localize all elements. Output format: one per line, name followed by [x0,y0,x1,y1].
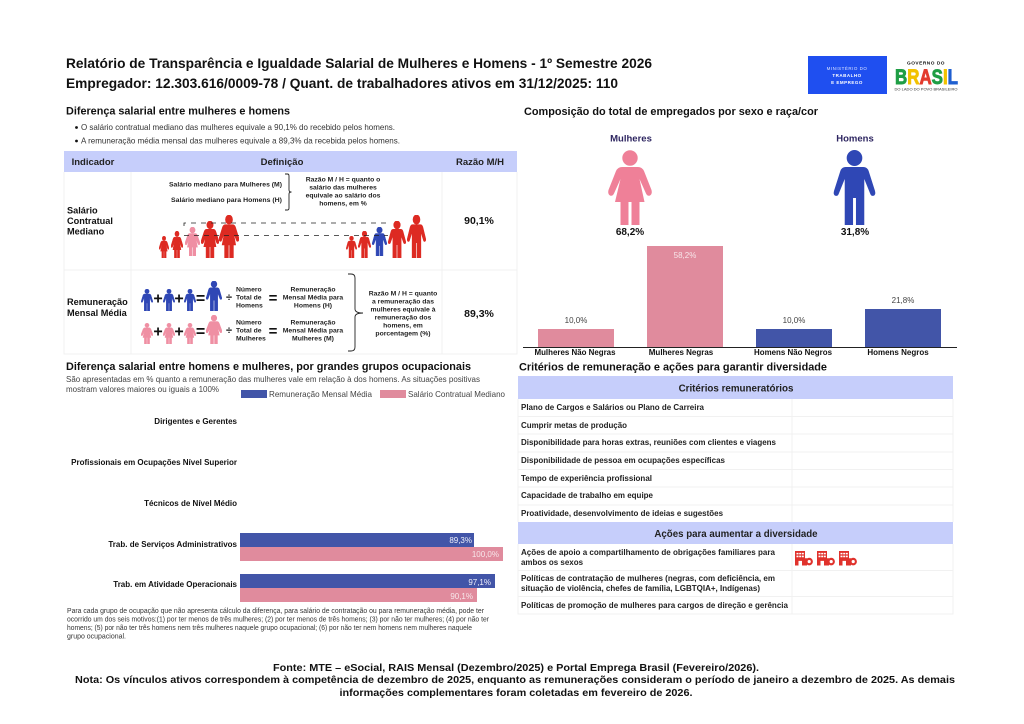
bar chart: sexo e raça/cor: 10,0% [565,316,587,325]
logo: Ministério do Trabalho e Emprego [808,56,887,94]
pictogram: mulheres 68,2%: Mulheres [610,134,652,144]
brace and ratio definition [348,274,437,351]
heading: diferença salarial: Diferença salarial entre mulheres e homens [66,106,290,118]
formula: homens: + [174,290,184,308]
formula: mulheres: ÷ [226,325,232,337]
footnote: homens; (5) por não ter três homens nem três mulheres naquele grupo ocupacional; (6) por não ter nem homens nem mulheres naquele [67,625,472,632]
panel: critérios remuneratórios [518,376,953,522]
bar chart: sexo e raça/cor: 10,0% [783,316,805,325]
formula: homens: Remuneração [291,286,335,294]
definition: salário mediano: Razão M / H = quanto o [306,176,380,184]
definition: salário mediano: Salário mediano para Homens (H) [171,197,282,204]
row label: salário contratual mediano: Mediano [67,226,105,236]
brace and ratio definition: homens, em [383,322,423,330]
bar chart: grupos ocupacionais: Técnicos de Nível Médio [144,499,237,508]
bar chart: grupos ocupacionais: 89,3% [449,536,472,545]
panel: ações para aumentar a diversidade: Políticas de contratação de mulheres (negras, com deficiência, em [521,574,775,583]
panel: ações para aumentar a diversidade [518,522,953,614]
row label: salário contratual mediano: Salário [67,206,98,216]
panel: critérios remuneratórios: Cumprir metas de produção [521,421,627,430]
panel: critérios remuneratórios: Disponibilidade para horas extras, reuniões com clientes e viagens [521,438,777,447]
formula: mulheres: Mulheres (M) [292,336,334,342]
panel: critérios remuneratórios: Tempo de experiência profissional [521,474,652,483]
bullets: resumo: O salário contratual mediano das mulheres equivale a 90,1% do recebido pelos homens. [81,122,395,132]
brace and ratio definition: Razão M / H = quanto [369,290,437,298]
formula: mulheres: = [196,324,205,340]
formula: mulheres: Remuneração [291,320,335,326]
table header: Indicador [72,157,115,168]
logo: Governo do Brasil: GOVERNO DO [907,60,945,66]
logo: Governo do Brasil: BRASIL [895,66,958,89]
bullets: resumo [75,122,400,146]
formula: mulheres: Mensal Média para [283,328,343,334]
heading: critérios: Critérios de remuneração e ações para garantir diversidade [519,362,827,374]
text block: explicação: mostram valores maiores ou iguais a 100% [66,385,219,394]
value: 89,3%: 89,3% [464,308,495,320]
brace and ratio definition: mulheres equivale à [371,306,436,314]
formula: mulheres [141,315,343,344]
bar chart: sexo e raça/cor: Mulheres Não Negras [534,348,616,357]
formula: mulheres: Número [236,320,262,326]
footnote: ocorrido um dos seis motivos:(1) por ter menos de três mulheres; (2) por ter menos de três homens; (3) por não ter mulheres; (4) por não ter [67,616,490,624]
definition: salário mediano [169,174,381,210]
formula: mulheres: Total de [236,328,262,334]
formula: homens: = [269,290,278,307]
bar chart: grupos ocupacionais: Trab. em Atividade Operacionais [113,580,238,589]
bar chart: sexo e raça/cor [523,246,957,357]
logo: Ministério do Trabalho e Emprego: E EMPREGO [831,80,863,85]
pictogram: homens 31,8% [834,134,875,238]
bar chart: grupos ocupacionais: 97,1% [468,578,491,587]
legend [241,389,505,399]
heading: composição: Composição do total de empregados por sexo e raça/cor [524,106,819,118]
legend: Remuneração Mensal Média [269,389,372,399]
row label: remuneração mensal média: Mensal Média [67,308,128,318]
legend: Salário Contratual Mediano [408,389,505,399]
icons: fábricas [795,551,857,566]
bar chart: grupos ocupacionais: Profissionais em Ocupações Nível Superior [71,458,237,467]
logo: Ministério do Trabalho e Emprego: MINISTÉRIO DO [827,65,867,71]
formula: mulheres: + [174,324,184,340]
bar chart: sexo e raça/cor: 21,8% [892,296,914,305]
value: 90,1%: 90,1% [464,215,495,227]
panel: critérios remuneratórios: Disponibilidade de pessoa em ocupações específicas [521,456,726,465]
bar chart: grupos ocupacionais: 100,0% [472,550,499,559]
definition: salário mediano: equivale ao salário dos [306,192,381,200]
bar chart: grupos ocupacionais: Trab. de Serviços Administrativos [108,540,238,549]
text block: explicação: São apresentadas em % quanto a remuneração das mulheres vale em relação à dos homens. As situações positivas [66,375,480,384]
formula: homens: + [153,290,163,308]
row label: salário contratual mediano [67,206,113,236]
pictogram: mulheres 68,2% [608,134,652,238]
definition: salário mediano: salário das mulheres [309,184,377,192]
formula: mulheres: + [153,324,163,340]
formula: homens: Total de [236,294,262,302]
pictogram: mulheres 68,2%: 68,2% [616,227,644,238]
definition: salário mediano: Salário mediano para Mulheres (M) [169,182,282,188]
bar chart: grupos ocupacionais [71,417,503,602]
footnote: Para cada grupo de ocupação que não apresenta cálculo da diferença, para salário de contratação ou para remuneração média, pode ter [67,608,485,615]
pictogram: homens 31,8%: 31,8% [841,227,869,238]
formula: mulheres: = [269,323,278,340]
brace and ratio definition: porcentagem (%) [375,330,431,338]
formula: homens: Homens (H) [294,302,332,310]
formula: mulheres: Mulheres [236,336,266,342]
logo: Governo do Brasil: DO LADO DO POVO BRASILEIRO [895,86,957,92]
table header [518,376,953,399]
formula: homens: Homens [236,302,263,310]
bar chart: sexo e raça/cor: Mulheres Negras [649,348,714,357]
title [66,55,652,91]
formula: homens: Número [236,286,262,294]
bar chart: grupos ocupacionais: Dirigentes e Gerentes [154,417,238,426]
logo: Ministério do Trabalho e Emprego: TRABALHO [832,73,862,78]
bar chart: grupos ocupacionais: 90,1% [450,592,473,601]
panel: ações para aumentar a diversidade: situação de violência, chefes de família, LGBTQIA+, Indígenas) [521,584,760,593]
footer: fonte e nota: Fonte: MTE – eSocial, RAIS Mensal (Dezembro/2025) e Portal Emprega Brasil (Fevereiro/2026). [273,662,759,674]
panel: ações para aumentar a diversidade: Políticas de promoção de mulheres para cargos de direção e gerência [521,601,789,610]
footer: fonte e nota: informações complementares foram coletadas em fevereiro de 2026. [340,687,693,699]
footnote: grupo ocupacional. [67,634,126,640]
pictogram: homens ordenados por salário [346,215,426,258]
panel: critérios remuneratórios: Proatividade, desenvolvimento de ideias e sugestões [521,509,724,518]
panel: ações para aumentar a diversidade: ambos os sexos [521,558,584,567]
table header: Razão M/H [456,157,504,168]
row label: remuneração mensal média [67,297,128,318]
row label: remuneração mensal média: Remuneração [67,297,128,307]
heading: grupos ocupacionais: Diferença salarial entre homens e mulheres, por grandes grupos ocupacionais [66,361,471,373]
panel: critérios remuneratórios: Plano de Cargos e Salários ou Plano de Carreira [521,403,705,412]
pictogram: homens 31,8%: Homens [836,134,874,144]
bar chart: sexo e raça/cor: Homens Negros [867,348,929,357]
footer: fonte e nota [75,662,955,699]
formula: homens: = [196,290,205,308]
pictogram: mulheres ordenadas por salário [159,215,239,258]
title: Empregador: 12.303.616/0009-78 / Quant. de trabalhadores ativos em 31/12/2025: 110 [66,75,618,91]
table header: Definição [261,157,304,168]
panel: critérios remuneratórios: Capacidade de trabalho em equipe [521,491,654,500]
text block: explicação [66,375,480,394]
table header [64,151,517,172]
definition: salário mediano: homens, em % [319,200,367,208]
formula: homens: ÷ [226,292,232,304]
formula: homens: Mensal Média para [283,294,343,302]
brace and ratio definition: remuneração dos [375,314,432,322]
panel: tabela de indicadores [64,151,517,354]
table header: Critérios remuneratórios [679,384,794,394]
footer: fonte e nota: Nota: Os vínculos ativos correspondem à competência de dezembro de 2025, enquanto as remunerações consideram o período de janeiro a dezembro de 2025. As demais [75,674,955,686]
footnote [67,608,490,640]
bar chart: sexo e raça/cor: Homens Não Negros [754,348,833,357]
title: Relatório de Transparência e Igualdade Salarial de Mulheres e Homens - 1º Semestre 2026 [66,55,652,71]
row label: salário contratual mediano: Contratual [67,216,113,226]
formula: homens [141,281,343,311]
table header: Ações para aumentar a diversidade [654,529,818,540]
panel: ações para aumentar a diversidade: Ações de apoio a compartilhamento de obrigações familiares para [521,548,776,557]
bullets: resumo: A remuneração média mensal das mulheres equivale a 89,3% da recebida pelos homens. [81,136,400,146]
bar chart: sexo e raça/cor: 58,2% [674,251,696,260]
table header [518,522,953,544]
brace and ratio definition: a remuneração das [372,298,434,306]
